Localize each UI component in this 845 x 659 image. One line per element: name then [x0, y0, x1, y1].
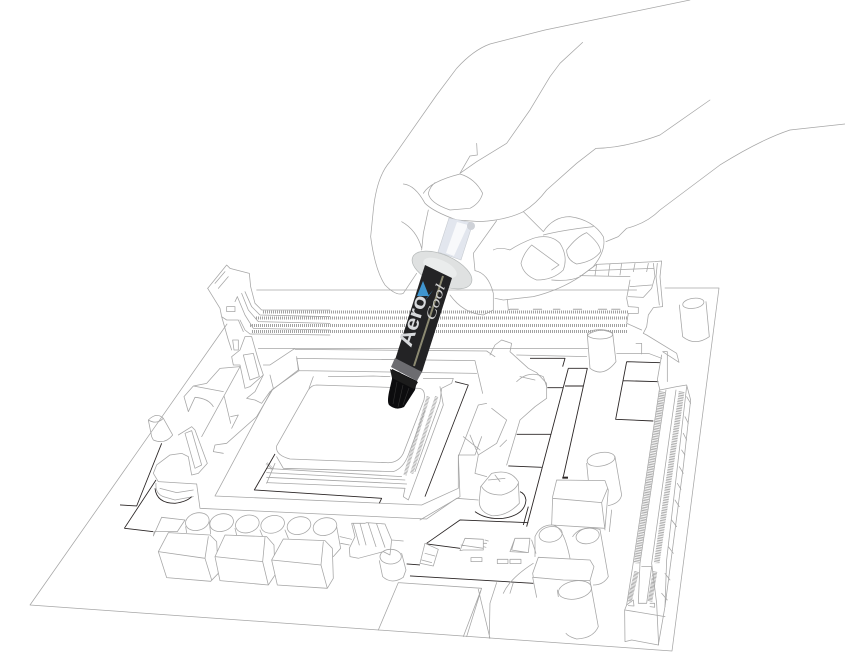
CPU socket and retention frame — [120, 349, 536, 638]
capacitor row — [153, 510, 341, 557]
left clip — [153, 427, 207, 484]
memory slots — [184, 261, 679, 453]
memory slot right latch — [580, 261, 679, 382]
capacitor — [586, 450, 616, 468]
index finger and nail — [493, 237, 565, 280]
hand outline — [371, 0, 845, 315]
motherboard outline — [30, 288, 719, 651]
logo — [417, 281, 433, 300]
screw post — [479, 472, 519, 516]
barrel — [395, 265, 452, 372]
syringe — [388, 218, 477, 409]
lower capacitors — [538, 525, 563, 544]
PCIe slot — [625, 355, 691, 645]
CPU — [276, 385, 424, 463]
inductor — [552, 480, 612, 532]
flange — [407, 243, 477, 297]
socket standoff capacitors — [587, 297, 709, 372]
middle finger nail — [543, 227, 601, 264]
pin header and small parts — [340, 523, 536, 638]
memory slot left latch — [184, 265, 637, 453]
right side components — [420, 340, 691, 645]
standoff — [148, 415, 173, 442]
plunger — [438, 218, 473, 260]
brand: Aero — [395, 292, 432, 350]
cap — [388, 369, 417, 409]
connector block bottom — [378, 563, 533, 638]
three inductors — [158, 533, 333, 588]
syringe: Cool — [424, 282, 449, 322]
thumbnail — [423, 174, 483, 210]
